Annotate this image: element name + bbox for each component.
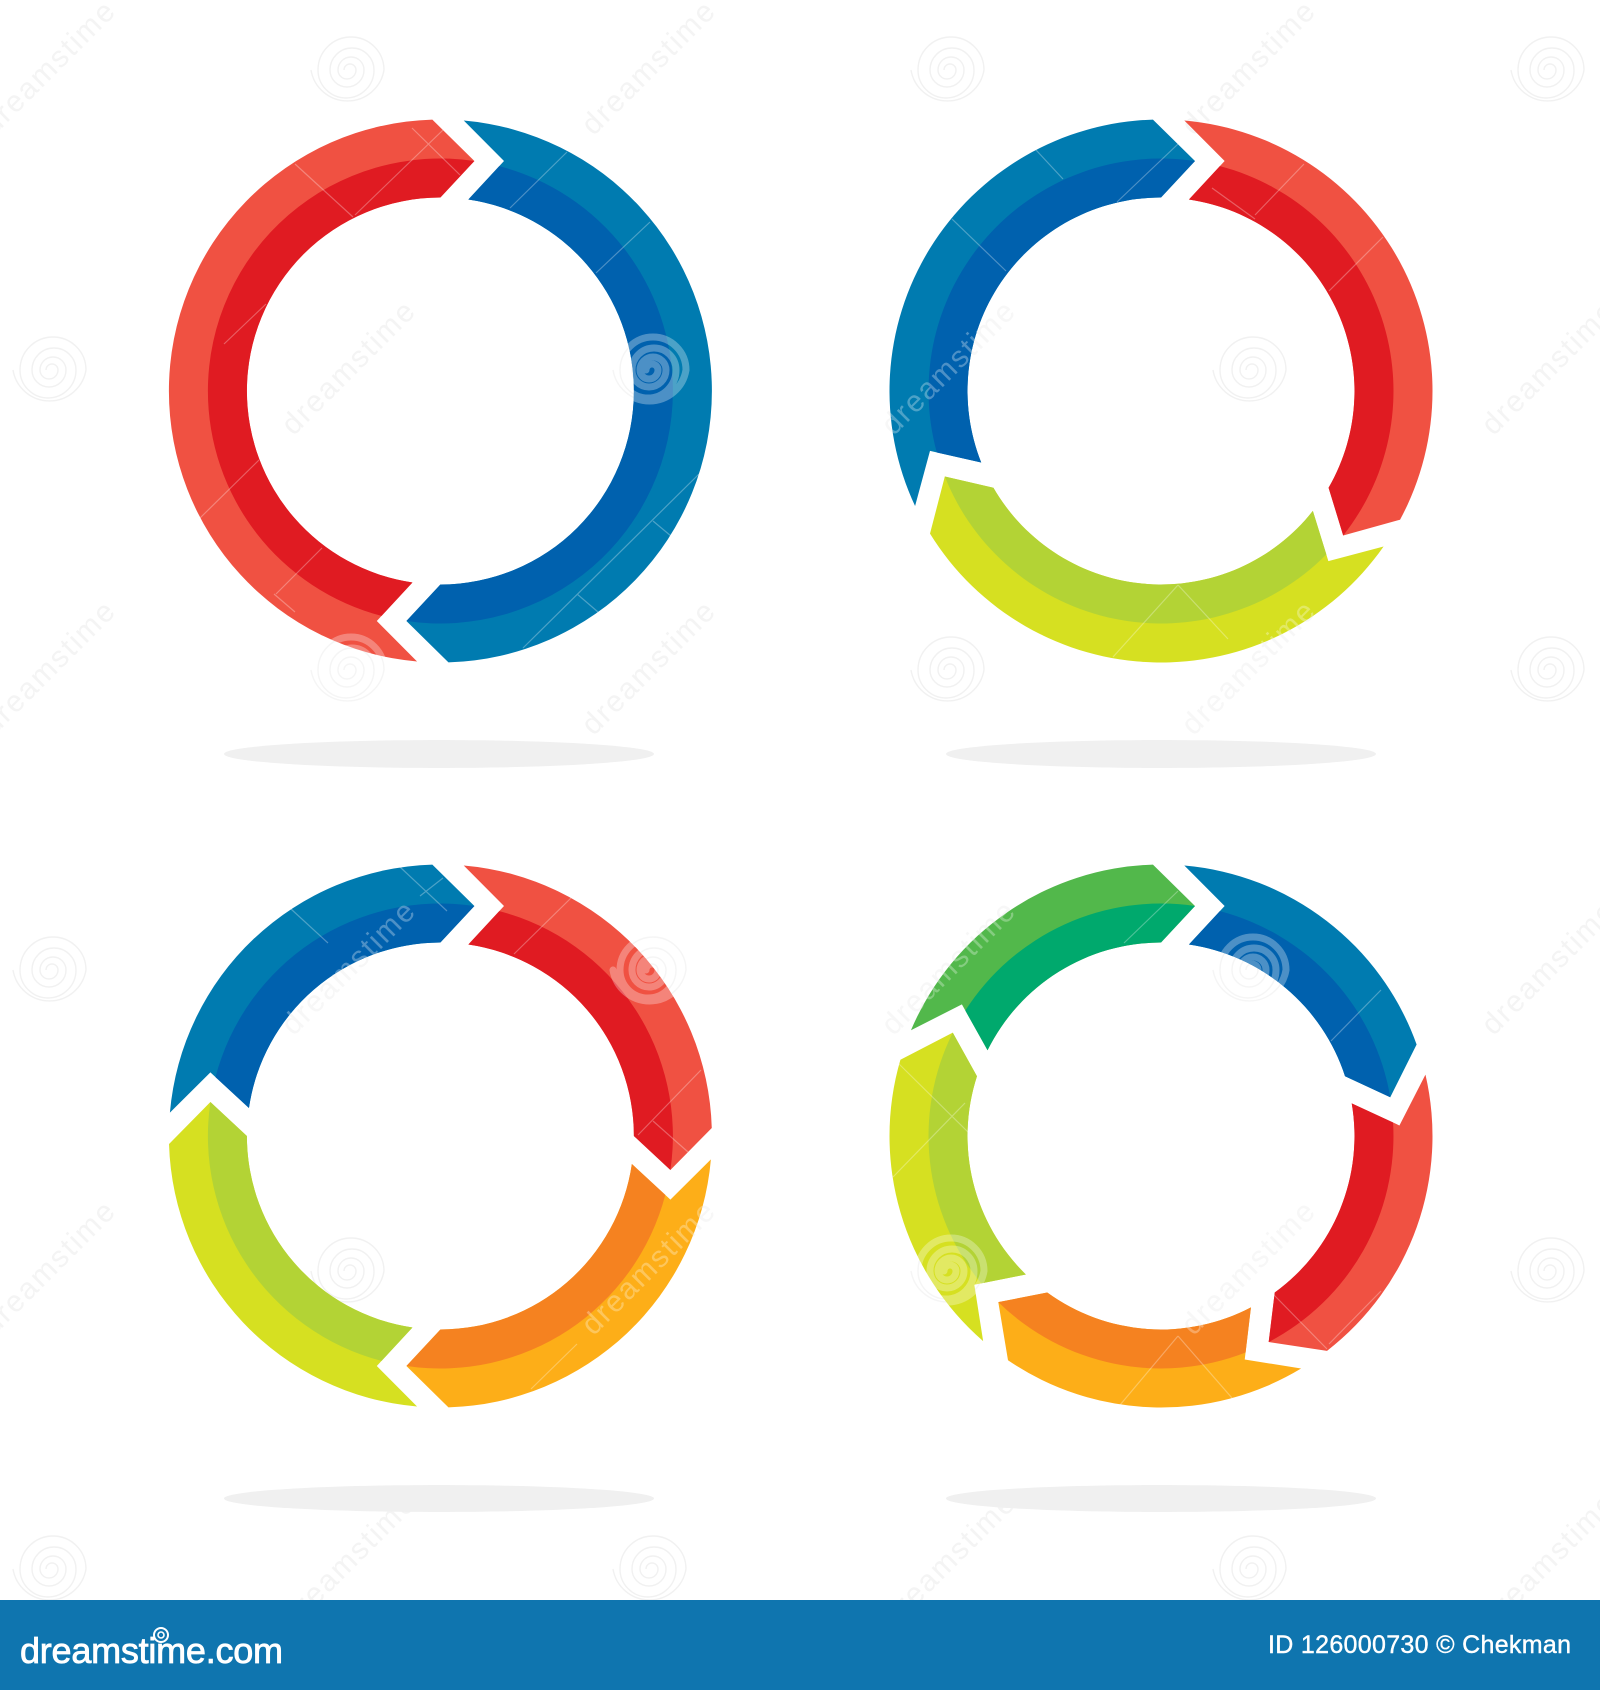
arrow: blue <box>1165 814 1430 1142</box>
watermark overlay layer <box>199 128 1383 1405</box>
arrow: lime <box>909 304 1396 762</box>
watermark background layer: dreamstime <box>1175 1195 1321 1341</box>
arrow: blue <box>170 865 474 1113</box>
watermark background layer: dreamstime <box>875 295 1021 441</box>
watermark background layer: dreamstime <box>575 1195 721 1341</box>
ring 4: five-step cycle <box>826 814 1523 1503</box>
watermark overlay layer: dreamstime <box>875 295 1021 441</box>
arrow: orange <box>406 1159 711 1407</box>
image ID and credit: ID 126000730 © Chekman <box>1268 1631 1571 1659</box>
arrow: lime <box>826 1020 1090 1347</box>
arrow: orange <box>974 1185 1313 1503</box>
watermark background layer: dreamstime <box>1175 595 1321 741</box>
ring 2: three-step cycle <box>889 98 1532 762</box>
watermark background layer: dreamstime <box>275 1487 421 1633</box>
arrow: red <box>464 866 712 1170</box>
ring 3: four-step cycle <box>169 865 712 1407</box>
arrow: lime <box>169 1102 417 1406</box>
arrow: green <box>911 865 1195 1050</box>
watermark overlay layer: dreamstime <box>1175 595 1321 741</box>
ground shadow: ring 3 <box>224 1485 654 1512</box>
watermark overlay layer: dreamstime <box>875 895 1021 1041</box>
ring 1: two-step cycle <box>169 120 712 662</box>
watermark background layer: dreamstime <box>275 895 421 1041</box>
watermark background layer: dreamstime <box>875 1487 1021 1633</box>
arrow: red <box>169 120 474 662</box>
arrow: blue <box>889 120 1195 506</box>
ground shadow: ring 4 <box>946 1485 1376 1512</box>
watermark background layer: dreamstime <box>575 595 721 741</box>
arrow: blue <box>406 120 712 662</box>
watermark overlay layer: dreamstime <box>275 895 421 1041</box>
arrow: red <box>1184 1058 1523 1376</box>
watermark background layer: dreamstime <box>875 895 1021 1041</box>
footer bar <box>0 1600 1600 1690</box>
watermark overlay layer: dreamstime <box>575 1195 721 1341</box>
arrow: red <box>1044 98 1532 556</box>
watermark background layer: dreamstime <box>275 295 421 441</box>
brand logotype: dreamstime.com <box>20 1630 283 1671</box>
ground shadow: ring 2 <box>946 740 1376 768</box>
ground shadow: ring 1 <box>224 740 654 768</box>
watermark overlay layer: dreamstime <box>1175 1195 1321 1341</box>
